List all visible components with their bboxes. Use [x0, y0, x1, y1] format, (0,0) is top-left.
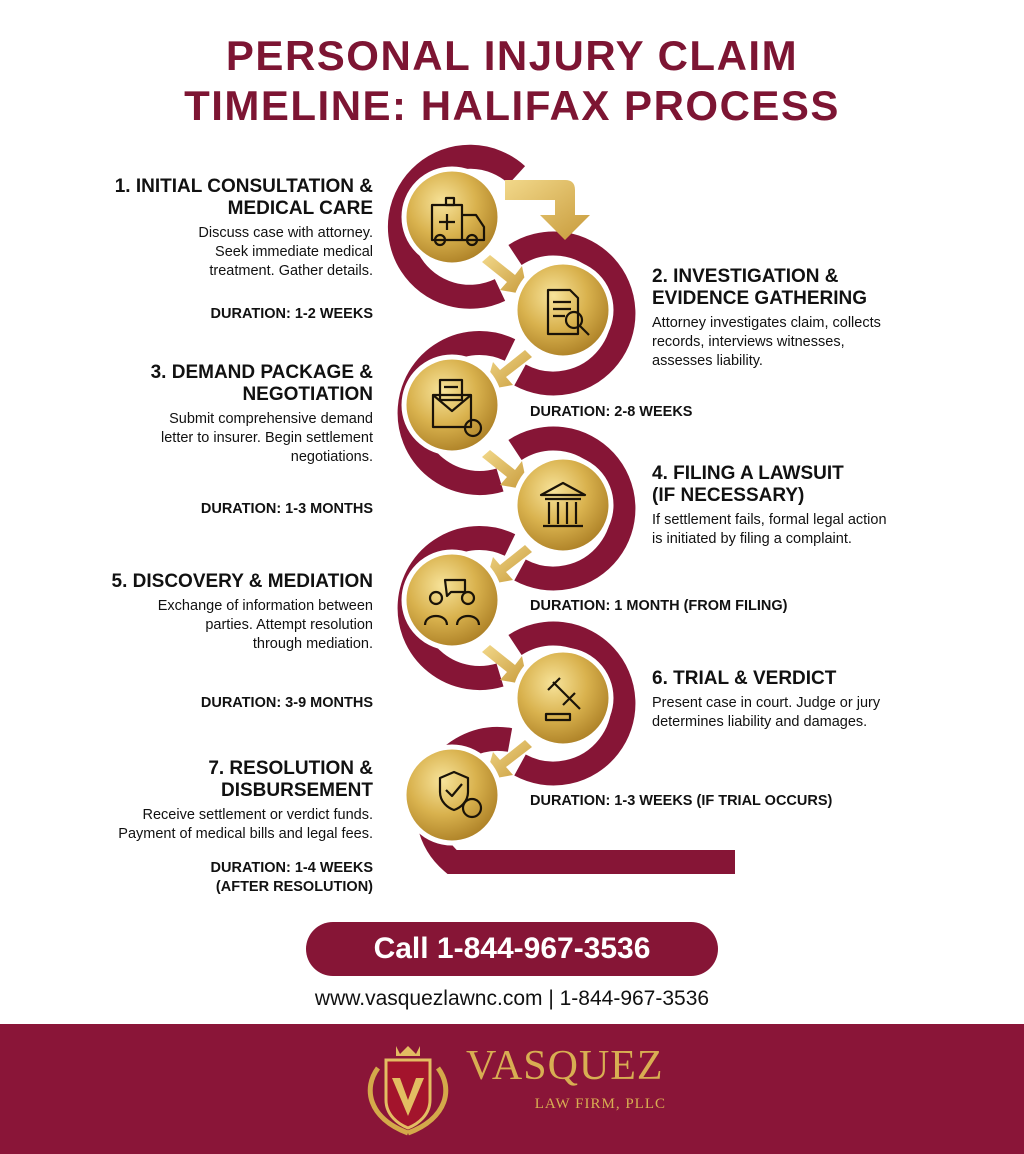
step 3 [151, 362, 373, 465]
step 1: MEDICAL CARE [228, 198, 373, 219]
step 1: Discuss case with attorney. [198, 225, 373, 241]
step 6: 6. TRIAL & VERDICT [652, 668, 836, 689]
step 7: Payment of medical bills and legal fees. [118, 826, 373, 842]
step 1 [115, 176, 373, 279]
icons [425, 198, 589, 817]
call button: Call 1-844-967-3536 [374, 932, 650, 965]
step 2 [652, 266, 881, 369]
step 5 [112, 571, 373, 652]
step 5: through mediation. [253, 636, 373, 652]
step 7: Receive settlement or verdict funds. [142, 807, 373, 823]
logo emblem [368, 1046, 448, 1136]
step 6: determines liability and damages. [652, 714, 867, 730]
step 2: assesses liability. [652, 353, 763, 369]
step 4: is initiated by filing a complaint. [652, 531, 852, 547]
logo text: VASQUEZ [466, 1043, 664, 1089]
step 5: Exchange of information between [158, 598, 373, 614]
step 1: treatment. Gather details. [209, 263, 373, 279]
duration 1: DURATION: 1-2 WEEKS [211, 306, 373, 322]
duration 7: DURATION: 1-4 WEEKS [211, 860, 373, 876]
duration 3: DURATION: 1-3 MONTHS [201, 501, 373, 517]
step 4 [652, 463, 887, 547]
step 3: 3. DEMAND PACKAGE & [151, 362, 373, 383]
duration 7 [211, 860, 373, 895]
step 5: parties. Attempt resolution [205, 617, 373, 633]
step 3: NEGOTIATION [242, 384, 373, 405]
step 4: (IF NECESSARY) [652, 485, 804, 506]
duration 4: DURATION: 1 MONTH (FROM FILING) [530, 598, 787, 614]
step 1: 1. INITIAL CONSULTATION & [115, 176, 373, 197]
title: TIMELINE: HALIFAX PROCESS [184, 82, 840, 129]
step 7: DISBURSEMENT [221, 780, 373, 801]
step 1: Seek immediate medical [215, 244, 373, 260]
step 3: letter to insurer. Begin settlement [161, 430, 373, 446]
step 6 [652, 668, 880, 730]
step 2: Attorney investigates claim, collects [652, 315, 881, 331]
step 6: Present case in court. Judge or jury [652, 695, 880, 711]
duration 2: DURATION: 2-8 WEEKS [530, 404, 692, 420]
arrows [482, 180, 590, 780]
step 7 [118, 758, 373, 842]
step 2: EVIDENCE GATHERING [652, 288, 867, 309]
step 2: 2. INVESTIGATION & [652, 266, 839, 287]
footer band: LAW FIRM, PLLC [535, 1096, 666, 1112]
title: PERSONAL INJURY CLAIM [226, 32, 798, 79]
duration 5: DURATION: 3-9 MONTHS [201, 695, 373, 711]
step 4: If settlement fails, formal legal action [652, 512, 887, 528]
step 3: negotiations. [291, 449, 373, 465]
step 2: records, interviews witnesses, [652, 334, 845, 350]
duration 6: DURATION: 1-3 WEEKS (IF TRIAL OCCURS) [530, 793, 832, 809]
duration 7: (AFTER RESOLUTION) [216, 879, 373, 895]
step 5: 5. DISCOVERY & MEDIATION [112, 571, 373, 592]
coins [404, 169, 611, 843]
footer band [0, 1024, 1024, 1154]
step 4: 4. FILING A LAWSUIT [652, 463, 844, 484]
step 7: 7. RESOLUTION & [208, 758, 373, 779]
title [184, 32, 840, 129]
step 3: Submit comprehensive demand [169, 411, 373, 427]
call button [306, 922, 718, 976]
website line: www.vasquezlawnc.com | 1-844-967-3536 [315, 987, 709, 1010]
